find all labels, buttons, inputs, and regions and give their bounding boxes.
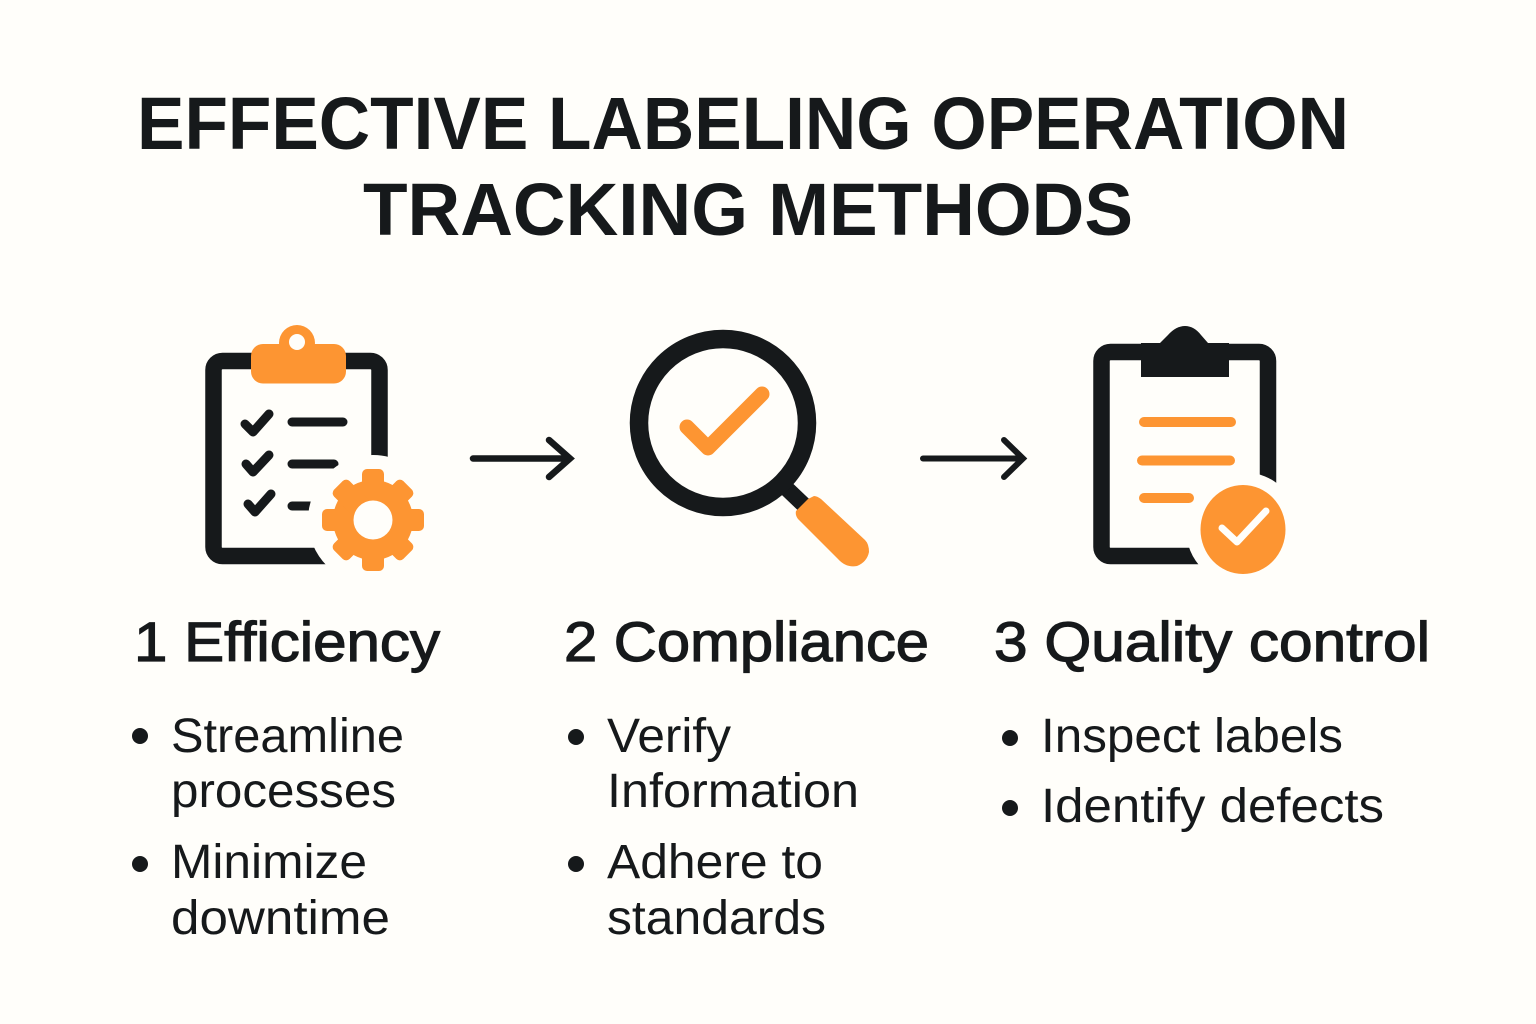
- arrow: compliance to quality control: [923, 440, 1023, 477]
- list: compliance: [568, 710, 859, 945]
- title: EFFECTIVE LABELING OPERATION: [137, 82, 1349, 165]
- list: efficiency: downtime: [171, 892, 390, 945]
- list: compliance: Verify: [607, 710, 731, 763]
- list: quality control: [1002, 710, 1384, 833]
- list: quality control: Identify defects: [1041, 780, 1384, 833]
- icon: clipboard with orange lines and check badge: [1102, 326, 1300, 586]
- title: [137, 82, 1349, 251]
- list: compliance: Adhere to: [607, 836, 823, 889]
- arrow: efficiency to compliance: [473, 440, 570, 477]
- list: efficiency: Minimize: [171, 836, 367, 889]
- list: efficiency: [132, 710, 404, 945]
- list: compliance: standards: [607, 892, 826, 945]
- heading: 2 Compliance: 2 Compliance: [564, 610, 929, 673]
- icon: magnifying glass with check: [639, 339, 869, 566]
- list: efficiency: Streamline: [171, 710, 404, 763]
- list: quality control: Inspect labels: [1041, 710, 1343, 763]
- title: TRACKING METHODS: [363, 168, 1133, 251]
- icon: checklist clipboard with gear: [214, 325, 438, 585]
- heading: 3 Quality control: 3 Quality control: [994, 610, 1430, 673]
- heading: 1 Efficiency: 1 Efficiency: [134, 610, 440, 673]
- list: compliance: Information: [607, 765, 859, 818]
- list: efficiency: processes: [171, 765, 396, 818]
